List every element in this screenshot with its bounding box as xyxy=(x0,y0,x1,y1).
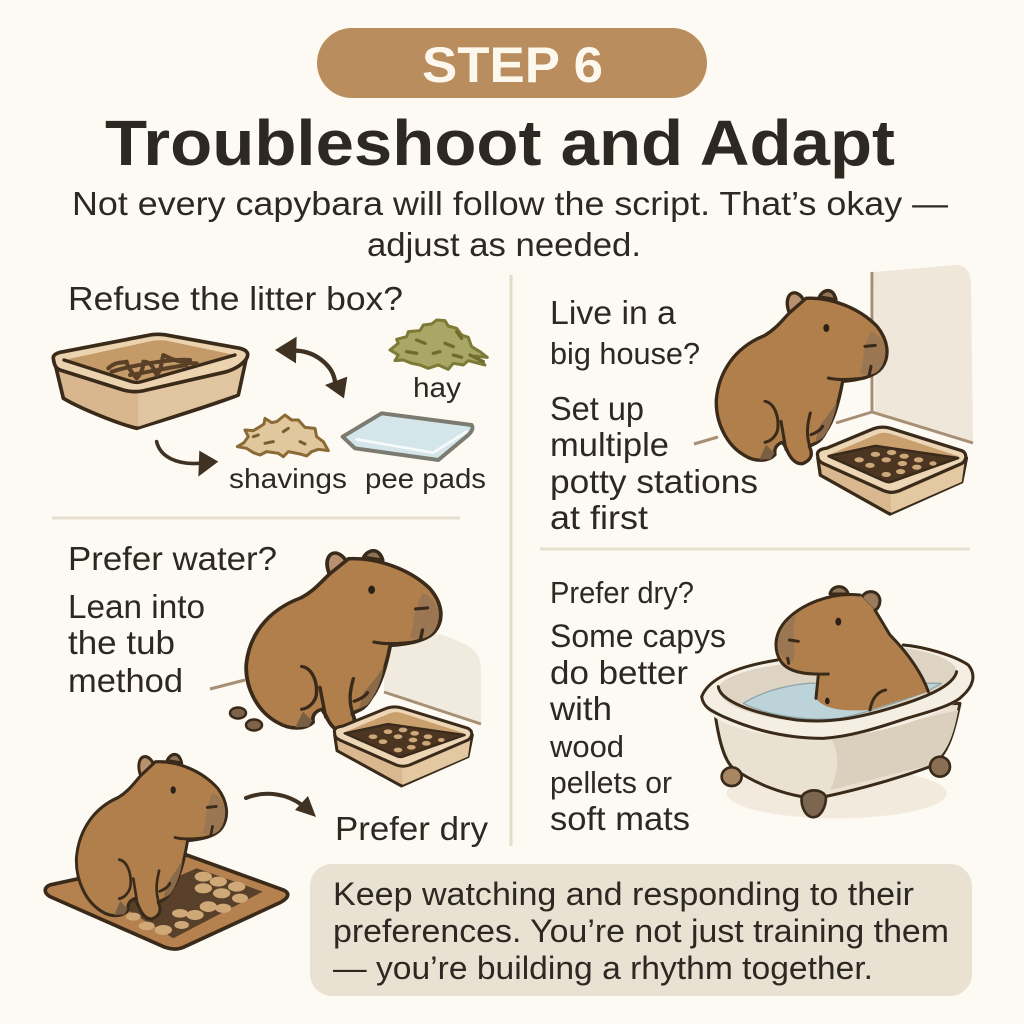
heading: refuse the litter box: Refuse the litter box? xyxy=(68,280,403,317)
icon: wood shavings pile xyxy=(237,415,328,457)
text: multiple potty stations: multiple xyxy=(550,426,669,463)
step badge xyxy=(317,28,707,98)
intro text xyxy=(72,185,948,263)
step badge: STEP 6 xyxy=(422,37,603,93)
illustration: capybara on mat xyxy=(76,754,227,919)
arrow: to shavings xyxy=(157,442,218,477)
arrow: to prefer dry xyxy=(246,794,316,817)
panel: big house xyxy=(550,265,973,536)
icon: pee pad xyxy=(343,413,473,460)
text: lean into the tub method: the tub xyxy=(68,624,175,661)
icon: large litter box xyxy=(53,334,248,428)
label: shavings: shavings xyxy=(229,463,347,494)
text: wood pellets or soft mats: wood xyxy=(549,729,624,764)
text: wood pellets or soft mats xyxy=(549,618,726,837)
heading: prefer dry: Prefer dry? xyxy=(550,575,694,610)
callout: keep watching xyxy=(310,864,972,996)
text: wood pellets or soft mats: do better xyxy=(550,654,688,691)
heading: live in a big house: Live in a xyxy=(550,294,677,331)
callout: keep watching: — you’re building a rhythm together. xyxy=(333,950,873,986)
vertical divider xyxy=(510,275,512,846)
illustration: mat xyxy=(45,855,288,949)
text: multiple potty stations: at first xyxy=(550,499,648,536)
illustration: small litter box xyxy=(817,427,966,514)
panel: prefer dry tub xyxy=(549,575,973,837)
illustration: room corner xyxy=(694,265,973,444)
illustration: capybara by litter box xyxy=(716,291,887,464)
panel: prefer dry mat xyxy=(45,754,489,949)
icon: droppings xyxy=(230,708,262,730)
text: lean into the tub method: Lean into xyxy=(68,588,205,625)
callout: keep watching: Keep watching and responding to their xyxy=(333,876,914,912)
panel: prefer water xyxy=(68,540,481,786)
text: multiple potty stations xyxy=(550,390,758,536)
label: prefer dry: Prefer dry xyxy=(335,810,489,847)
illustration: capybara beside droppings xyxy=(246,551,441,732)
text: wood pellets or soft mats: Some capys xyxy=(550,618,726,654)
right horizontal divider xyxy=(540,548,970,550)
text: multiple potty stations: Set up xyxy=(550,390,644,427)
arrow: double headed xyxy=(275,337,347,398)
title: Troubleshoot and Adapt xyxy=(105,107,895,179)
label: pee pads: pee pads xyxy=(365,463,486,494)
heading: live in a big house xyxy=(550,294,700,371)
illustration: wall corner xyxy=(210,634,481,724)
left horizontal divider xyxy=(52,516,460,520)
heading: live in a big house: big house? xyxy=(550,336,700,371)
text: lean into the tub method xyxy=(68,588,205,699)
text: wood pellets or soft mats: soft mats xyxy=(550,800,690,837)
illustrations: litter options xyxy=(53,320,487,477)
label: hay: hay xyxy=(413,372,461,403)
panel: refuse the litter box xyxy=(53,280,487,494)
illustration: litter box with pellets xyxy=(334,707,472,786)
text: multiple potty stations: potty stations xyxy=(550,463,758,500)
text: lean into the tub method: method xyxy=(68,662,183,699)
heading: prefer water: Prefer water? xyxy=(68,540,277,577)
illustration: capybara in bathtub xyxy=(702,587,973,818)
intro text: Not every capybara will follow the script. That’s okay — xyxy=(72,185,948,222)
intro text: adjust as needed. xyxy=(367,226,641,263)
icon: hay pile xyxy=(390,320,487,369)
callout: keep watching: preferences. You’re not just training them xyxy=(333,913,949,949)
text: wood pellets or soft mats: with xyxy=(549,690,612,727)
text: wood pellets or soft mats: pellets or xyxy=(550,765,672,800)
